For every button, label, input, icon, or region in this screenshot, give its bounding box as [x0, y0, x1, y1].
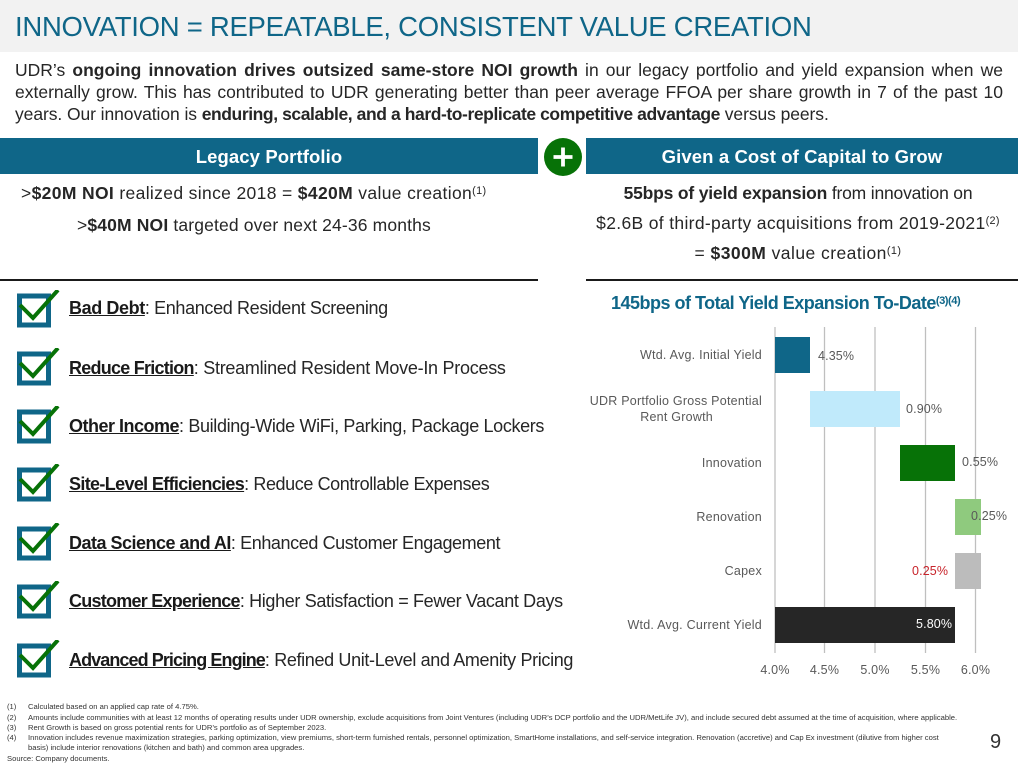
footnotes: Calculated based on an applied cap rate of 4.75%.: [28, 702, 199, 711]
bar: current yield: 5.80%: [916, 617, 952, 631]
axis labels: 5.0%: [860, 663, 890, 677]
axis labels: 4.5%: [810, 663, 839, 677]
bar: capex: 0.25%: [912, 564, 948, 578]
category labels: Wtd. Avg. Initial Yield: [640, 348, 762, 362]
checklist: [17, 290, 573, 678]
title: INNOVATION = REPEATABLE, CONSISTENT VALUE CREATION: [15, 11, 812, 42]
category labels: [590, 348, 762, 632]
item 7: Advanced Pricing Engine: Refined Unit-Level and Amenity Pricing: [69, 650, 573, 670]
growth text: = $300M value creation(1): [695, 243, 901, 263]
item 5: Data Science and AI: Enhanced Customer Engagement: [69, 533, 500, 553]
check icon 2: [17, 348, 60, 386]
bar: renovation: 0.25%: [971, 509, 1007, 523]
legacy text: [21, 183, 486, 235]
item 6: Customer Experience: Higher Satisfaction = Fewer Vacant Days: [69, 591, 563, 611]
header: cost of capital: [586, 138, 1018, 174]
intro paragraph: [15, 60, 1003, 124]
bar: current yield: [775, 607, 955, 643]
bar: capex: [912, 553, 981, 589]
axis labels: 4.0%: [760, 663, 790, 677]
waterfall bar chart: [590, 327, 1007, 677]
growth text: [596, 183, 1000, 263]
check icon 7: [17, 640, 60, 678]
footnotes: basis) include interior renovations (kitchen and bath) and common area upgrades.: [28, 743, 304, 752]
bar: initial yield: 4.35%: [818, 349, 854, 363]
category labels: Renovation: [696, 510, 762, 524]
header: legacy portfolio: [0, 138, 538, 174]
item 2: Reduce Friction: Streamlined Resident Move-In Process: [69, 358, 506, 378]
category labels: Capex: [725, 564, 762, 578]
header: cost of capital: Given a Cost of Capital to Grow: [662, 146, 942, 167]
footnotes: (2): [7, 713, 16, 722]
item 4: Site-Level Efficiencies: Reduce Controllable Expenses: [69, 474, 489, 494]
check icon 4: [17, 464, 60, 502]
bar: innovation: 0.55%: [962, 455, 998, 469]
growth text: 55bps of yield expansion from innovation on: [624, 183, 972, 203]
footnotes: Rent Growth is based on gross potential rents for UDR’s portfolio as of September 2023.: [28, 723, 326, 732]
bar: renovation: [955, 499, 1007, 535]
footnotes: Innovation includes revenue maximization strategies, parking optimization, view premiums, short-term furnished rentals, personnel optimization, SmartHome installations, and self-service integration. Renovation (accretive) and Cap Ex investment (dilutive from higher cost: [28, 733, 939, 742]
intro paragraph: years. Our innovation is enduring, scalable, and a hard-to-replicate competitive advantage versus peers.: [15, 104, 829, 124]
item 1: Bad Debt: Enhanced Resident Screening: [69, 298, 388, 318]
check icon 6: [17, 581, 60, 618]
item 3: Other Income: Building-Wide WiFi, Parking, Package Lockers: [69, 416, 544, 436]
footnotes: [7, 702, 957, 763]
icon: plus: [544, 138, 582, 176]
page number: 9: [990, 731, 1001, 753]
bar: rent growth: 0.90%: [906, 402, 942, 416]
bar: innovation: [900, 445, 998, 481]
footnotes: (3): [7, 723, 16, 732]
axis labels: 5.5%: [911, 663, 940, 677]
category labels: Wtd. Avg. Current Yield: [627, 618, 762, 632]
intro paragraph: UDR’s ongoing innovation drives outsized same-store NOI growth in our legacy portfolio and yield expansion when we: [15, 60, 1003, 80]
footnotes: Source: Company documents.: [7, 754, 110, 763]
intro paragraph: externally grow. This has contributed to UDR generating better than peer average FFOA per share growth in 7 of the past 10: [15, 82, 1003, 102]
footnotes: (1): [7, 702, 16, 711]
title bar: [0, 0, 1018, 52]
axis labels: 6.0%: [961, 663, 990, 677]
check icon 3: [17, 406, 60, 444]
legacy text: >$40M NOI targeted over next 24-36 months: [77, 215, 431, 235]
category labels: UDR Portfolio Gross Potential: [590, 394, 762, 408]
growth text: $2.6B of third-party acquisitions from 2019-2021(2): [596, 213, 1000, 233]
footnotes: (4): [7, 733, 16, 742]
bar: initial yield: [775, 337, 854, 373]
category labels: Innovation: [702, 456, 762, 470]
footnotes: Amounts include communities with at least 12 months of operating results under UDR ownership, exclude acquisitions from Joint Ventures (including UDR’s DCP portfolio and the UDR/MetLife JV), and include secured debt assumed at the time of acquisition, where applicable.: [28, 713, 957, 722]
category labels: Rent Growth: [640, 410, 713, 424]
check icon 1: [17, 290, 60, 328]
header: legacy portfolio: Legacy Portfolio: [196, 146, 342, 167]
bar: rent growth: [810, 391, 942, 427]
check icon 5: [17, 523, 60, 560]
legacy text: >$20M NOI realized since 2018 = $420M value creation(1): [21, 183, 486, 203]
axis labels: [760, 663, 990, 677]
chart title: 145bps of Total Yield Expansion To-Date(3)(4): [611, 293, 960, 313]
